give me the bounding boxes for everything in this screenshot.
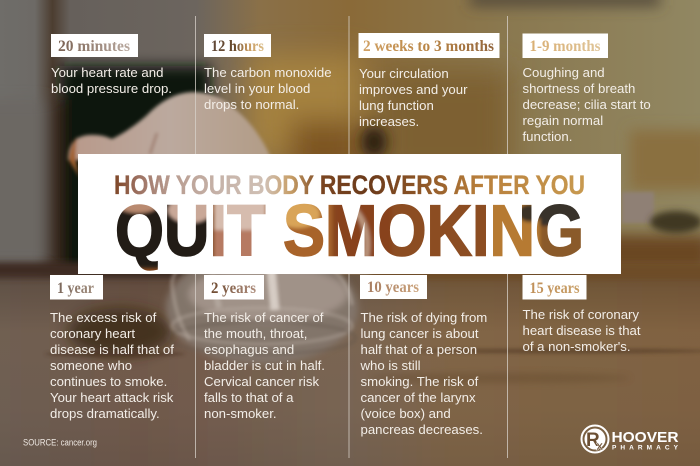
panel: 10 years: smoking. The risk of: [360, 374, 479, 389]
panel: 12 hours: The carbon monoxide: [204, 65, 332, 80]
panel: 10 years: pancreas decreases.: [360, 422, 483, 437]
panel: 1-9 months: function.: [522, 129, 572, 144]
panel: 2 years: The risk of cancer of: [204, 310, 324, 325]
icon: Rx circle: R: [586, 430, 600, 451]
title line: quit smoking: QUIT SMOKING: [115, 192, 584, 272]
panel: 10 years: half that of a person: [360, 342, 477, 357]
panel: 2 weeks to 3 months: increases.: [359, 114, 419, 129]
panel: 10 years: The risk of dying from: [360, 310, 487, 325]
wood table: [0, 262, 700, 466]
panel: 2 weeks to 3 months: improves and your: [359, 82, 468, 97]
logo: Hoover Pharmacy: PHARMACY: [612, 444, 679, 452]
ashtray: [166, 252, 358, 364]
panel: 1-9 months: 1-9 months: [530, 38, 600, 55]
panel: 20 minutes: blood pressure drop.: [51, 81, 172, 96]
panel: 10 years: cancer of the larynx: [360, 390, 476, 405]
divider lines between columns: [196, 16, 508, 458]
title line: how your body recovers: HOW YOUR BODY RECOVERS AFTER YOU: [114, 170, 585, 200]
panel: 1 year: continues to smoke.: [50, 374, 167, 389]
panel: 20 minutes: Your heart rate and: [51, 65, 163, 80]
panel: 1-9 months: regain normal: [522, 113, 603, 128]
logo: Hoover Pharmacy: HOOVER: [612, 429, 679, 446]
panel: 10 years: (voice box) and: [360, 406, 451, 421]
panel: 10 years: 10 years: [367, 279, 419, 296]
panel: 15 years: of a non-smoker's.: [522, 339, 631, 354]
panel: 2 years: Cervical cancer risk: [204, 374, 319, 389]
panel: 1 year: drops dramatically.: [50, 406, 160, 421]
icon: Rx circle: x: [596, 438, 604, 453]
panel: 1 year: coronary heart: [50, 326, 135, 341]
panel: 10 years: who is still: [360, 358, 421, 373]
panel: 2 years: non-smoker.: [204, 406, 277, 421]
panel: 2 years: falls to that of a: [204, 390, 294, 405]
panel: 15 years: [522, 275, 641, 354]
panel: 10 years: [360, 275, 487, 437]
panel: 2 years: the mouth, throat,: [204, 326, 307, 341]
panel: 15 years: heart disease is that: [522, 323, 641, 338]
panel: 2 years: 2 years: [211, 280, 256, 297]
logo: Hoover Pharmacy: [582, 426, 679, 453]
panel: 12 hours: 12 hours: [211, 38, 264, 55]
panel: 15 years: The risk of coronary: [522, 307, 639, 322]
panel: 20 minutes: [51, 34, 172, 96]
panel: 2 weeks to 3 months: [358, 33, 500, 129]
panel: 2 weeks to 3 months: 2 weeks to 3 months: [363, 38, 494, 55]
panel: 2 years: esophagus and: [204, 342, 294, 357]
panel: 1-9 months: [522, 34, 651, 144]
panel: 1-9 months: shortness of breath: [522, 81, 635, 96]
panel: 1 year: someone who: [50, 358, 132, 373]
source note: SOURCE: cancer.org: [23, 438, 97, 448]
panel: 1 year: [50, 275, 174, 421]
panel: 1 year: Your heart attack risk: [50, 390, 174, 405]
panel: 2 years: [204, 275, 325, 421]
panel: 1 year: The excess risk of: [50, 310, 157, 325]
panel: 1-9 months: Coughing and: [522, 65, 605, 80]
panel: 2 weeks to 3 months: lung function: [359, 98, 434, 113]
title banner: [78, 154, 621, 274]
panel: 10 years: lung cancer is about: [360, 326, 479, 341]
hand: [68, 92, 272, 178]
panel: 1-9 months: decrease; cilia start to: [522, 97, 651, 112]
panel: 2 weeks to 3 months: Your circulation: [359, 66, 449, 81]
panel: 15 years: 15 years: [530, 280, 580, 297]
panel: 2 years: bladder is cut in half.: [204, 358, 325, 373]
panel: 20 minutes: 20 minutes: [58, 38, 130, 55]
panel: 12 hours: drops to normal.: [204, 97, 299, 112]
panel: 1 year: 1 year: [57, 280, 94, 297]
icon: Rx circle: [582, 426, 608, 453]
panel: 12 hours: [204, 34, 332, 112]
panel: 1 year: disease is half that of: [50, 342, 174, 357]
panel: 12 hours: level in your blood: [204, 81, 310, 96]
